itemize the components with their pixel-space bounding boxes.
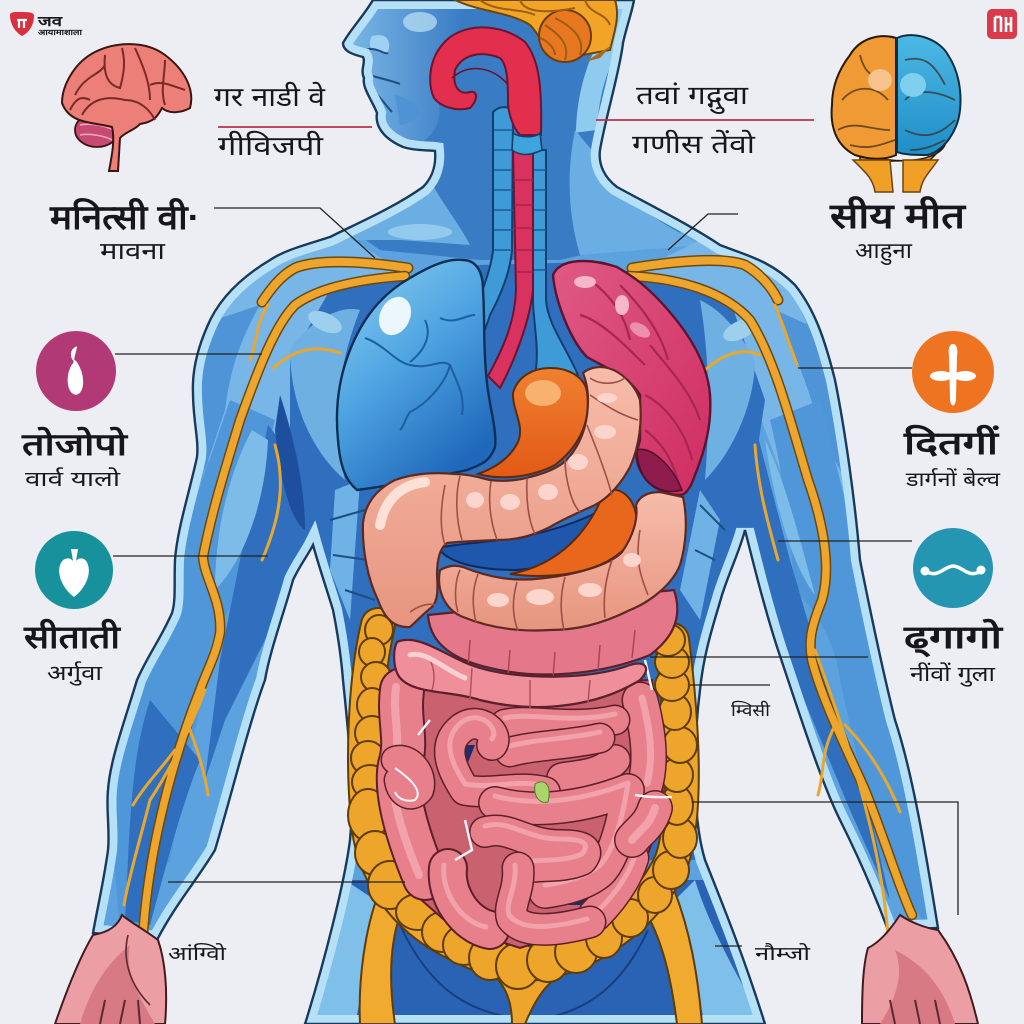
icon: pink brain — [62, 44, 191, 171]
top right label — [632, 80, 757, 159]
face and head — [424, 9, 609, 149]
shoulders — [208, 238, 394, 461]
top-left logo: आयामाशाला — [38, 28, 83, 37]
icon: teal circle heart — [35, 531, 113, 609]
left hand — [55, 915, 166, 1024]
left label 1: मनित्सी वी· — [49, 197, 200, 237]
upper colon — [363, 367, 641, 627]
left label 3: सीताती — [23, 618, 122, 655]
torso — [290, 262, 765, 860]
blue trachea tubes — [465, 107, 578, 375]
gold nerves — [124, 260, 912, 935]
top left label: गीविजपी — [218, 130, 324, 161]
small label: bottom right: नौम्जो — [755, 942, 811, 965]
icon: orange circle — [912, 331, 994, 413]
right label 2: डार्गनों बेल्व — [905, 468, 1001, 491]
left label 1 — [49, 197, 200, 265]
lung — [337, 260, 495, 490]
right label 2 — [903, 424, 1001, 491]
left label 2: वार्व यालो — [25, 467, 121, 491]
small intestine coils — [385, 660, 672, 948]
top-left logo — [10, 12, 83, 37]
icon: orange blue brain — [832, 35, 960, 192]
right label 1 — [829, 196, 966, 265]
top left label — [214, 81, 326, 161]
red esophagus — [430, 27, 542, 388]
leader lines — [113, 120, 958, 946]
stomach — [478, 368, 588, 477]
large intestine orange lumps — [348, 615, 702, 1024]
right label 3: नींवों गुला — [910, 662, 996, 687]
icon: teal circle wave — [913, 528, 993, 608]
right hand — [862, 915, 978, 1024]
left label 1: मावना — [100, 238, 166, 265]
top left label: गर नाडी वे — [214, 81, 326, 112]
icon: maroon circle — [36, 331, 116, 411]
lower body — [351, 880, 744, 1015]
right arm muscles — [770, 400, 930, 930]
left label 2: तोजोपो — [21, 426, 128, 462]
top-right logo — [987, 9, 1017, 39]
right label 3: ढ्गागो — [903, 618, 1004, 657]
right label 2: दितगीं — [903, 424, 1000, 461]
right label 3 — [903, 618, 1004, 687]
left label 3: अर्गुवा — [47, 661, 103, 686]
ribs — [330, 480, 360, 620]
small label: mid right: म्विसी — [731, 700, 771, 720]
neck — [345, 130, 690, 260]
pink organ — [553, 261, 710, 495]
blue and orange under colon — [438, 489, 637, 576]
top right label: तवां गद्गुवा — [636, 80, 750, 114]
brain at top of head — [455, 0, 617, 62]
top-left logo: जव — [37, 13, 64, 29]
upper small bowel bands — [394, 590, 677, 708]
lower transverse colon — [439, 492, 686, 631]
left label 2 — [21, 426, 128, 491]
right label 1: आहुना — [855, 238, 912, 265]
small label: bottom left: आंग्विो — [168, 942, 227, 965]
top right label: गणीस तेंवो — [632, 129, 757, 159]
right label 1: सीय मीत — [829, 196, 966, 236]
left arm muscles — [108, 400, 275, 930]
left label 3 — [23, 618, 122, 686]
